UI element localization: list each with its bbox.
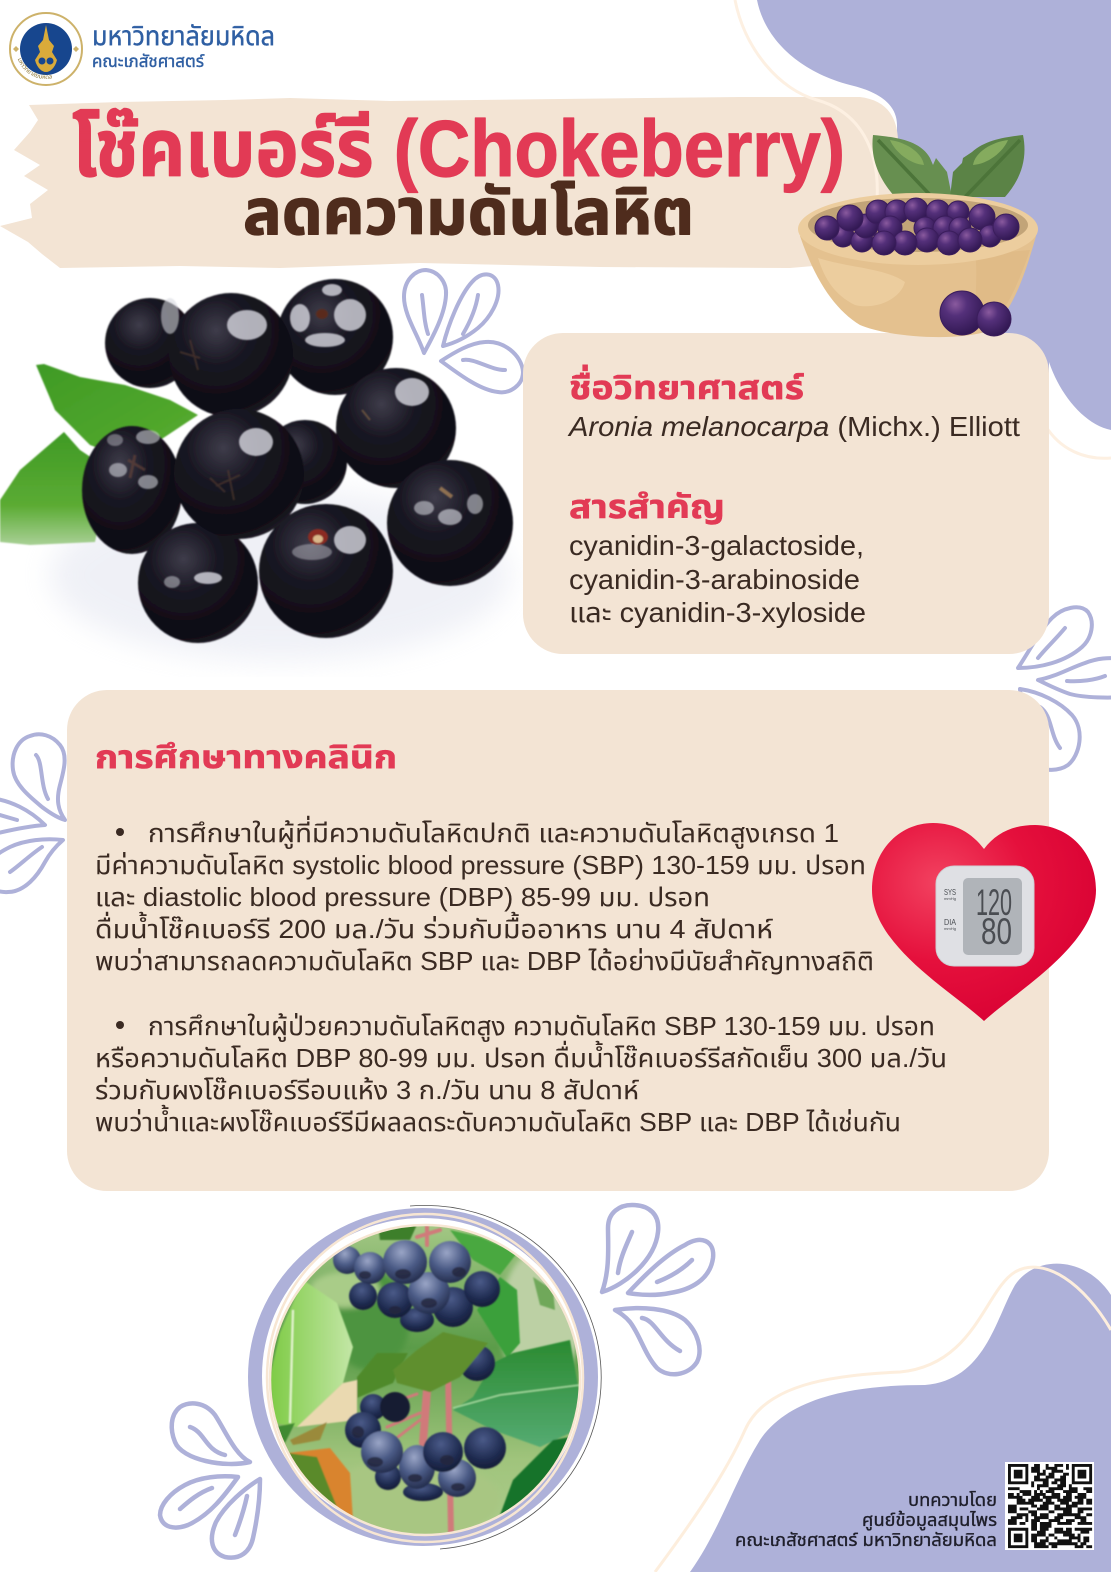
study 2 text: ร่วมกับผงโช๊คเบอร์รีอบแห้ง 3 ก./วัน นาน 8 สัปดาห์: [95, 1075, 640, 1105]
background blob: bottom right: [690, 1264, 1111, 1572]
photo: chokeberries with leaves: [0, 279, 513, 660]
decorative petals: lower left of circular photo: [160, 1403, 260, 1558]
title banner brush stroke: [0, 97, 900, 268]
study 1 text: ดื่มน้ำโช๊คเบอร์รี 200 มล./วัน ร่วมกับมื้ออาหาร นาน 4 สัปดาห์: [95, 911, 774, 944]
bowl rim: [798, 193, 1038, 265]
study 2 text: การศึกษาในผู้ป่วยความดันโลหิตสูง ความดันโลหิต SBP 130-159 มม. ปรอท: [148, 1011, 935, 1042]
circular photo: chokeberries on branch: [248, 1205, 601, 1549]
monitor readings: 80: [981, 911, 1012, 952]
heading: clinical studies: การศึกษาทางคลินิก: [95, 739, 397, 775]
study 1 text: [95, 815, 874, 976]
study 2 text: หรือความดันโลหิต DBP 80-99 มม. ปรอท ดื่มน้ำโช๊คเบอร์รีสกัดเย็น 300 มล./วัน: [95, 1040, 947, 1073]
footer credit text: ศูนย์ข้อมูลสมุนไพร: [862, 1510, 997, 1532]
compounds list: cyanidin-3-arabinoside: [569, 564, 860, 595]
bowl inner: [808, 198, 1028, 252]
title line 2: ลดความดันโลหิต: [243, 176, 694, 248]
monitor screen: [963, 878, 1022, 955]
compounds list: [569, 530, 866, 628]
study 1 text: การศึกษาในผู้ที่มีความดันโลหิตปกติ และความดันโลหิตสูงเกรด 1: [148, 815, 839, 849]
compounds list: และ cyanidin-3-xyloside: [569, 597, 866, 628]
logo text: คณะเภสัชศาสตร์: [92, 52, 205, 71]
berries: [82, 279, 513, 643]
title: [72, 104, 845, 248]
logo: Mahidol University: [9, 12, 275, 86]
study 1 text: มีค่าความดันโลหิต systolic blood pressure (SBP) 130-159 มม. ปรอท: [95, 850, 866, 880]
decorative petals: right of circular photo: [602, 1205, 713, 1374]
stems: [380, 1220, 451, 1533]
monitor readings: [944, 882, 1012, 952]
leaves: [0, 364, 198, 545]
cast shadow: [50, 490, 510, 660]
monitor body: [936, 866, 1034, 966]
study 1 text: และ diastolic blood pressure (DBP) 85-99 มม. ปรอท: [95, 882, 710, 912]
monitor readings: 120: [976, 882, 1012, 923]
thin outer ring: [410, 1205, 601, 1549]
compounds list: cyanidin-3-galactoside,: [569, 530, 864, 561]
background blob: top right: [757, 0, 1111, 430]
decorative petals: right of panels: [1018, 607, 1111, 770]
heading: scientific name: ชื่อวิทยาศาสตร์: [569, 364, 804, 406]
leaves: [270, 1218, 580, 1523]
bowl body: [800, 236, 1036, 337]
panel: scientific name and key compounds: [523, 333, 1049, 654]
monitor readings: DIA: [944, 918, 957, 927]
decorative petals: left of clinical panel: [0, 734, 65, 892]
upper berry cluster: [333, 1240, 500, 1332]
icon: heart with blood pressure monitor: [872, 823, 1096, 1021]
monitor readings: mmHg: [944, 926, 956, 931]
QR code: [1005, 1462, 1094, 1550]
study 1 text: พบว่าสามารถลดความดันโลหิต SBP และ DBP ได้อย่างมีนัยสำคัญทางสถิติ: [95, 946, 874, 976]
decorative petals: near berries: [404, 270, 523, 392]
monitor readings: mmHg: [944, 896, 956, 901]
photo contents: [265, 1218, 585, 1540]
lower berry cluster: [345, 1332, 506, 1501]
study 2 text: พบว่าน้ำและผงโช๊คเบอร์รีมีผลลดระดับความดันโลหิต SBP และ DBP ได้เช่นกัน: [95, 1104, 901, 1137]
icon: bowl of berries: [798, 135, 1038, 337]
bowl leaves: [872, 135, 1024, 197]
logo text: มหาวิทยาลัยมหิดล: [92, 21, 275, 51]
heading: key compounds: สารสำคัญ: [569, 488, 725, 525]
inner cream rings: [267, 1214, 583, 1542]
footer credit text: คณะเภสัชศาสตร์ มหาวิทยาลัยมหิดล: [735, 1530, 997, 1550]
title line 1: โช๊คเบอร์รี (Chokeberry): [72, 104, 845, 193]
lavender ring: [248, 1208, 598, 1546]
study 2 text: [95, 1011, 947, 1137]
cream contour line: top right: [735, 0, 1111, 458]
loose berries: [940, 291, 1011, 336]
monitor readings: SYS: [944, 888, 956, 897]
berry highlights and calyx details: [107, 284, 483, 588]
logo text: [92, 21, 275, 71]
footer credit text: [735, 1490, 997, 1550]
logo seal: มหาวิทยาลัยมหิดล: [18, 58, 52, 79]
panel: clinical studies: [67, 690, 1049, 1191]
heart: [872, 823, 1096, 1021]
scientific name: Aronia melanocarpa (Michx.) Elliott: [567, 411, 1020, 442]
blurred background: [310, 1250, 580, 1540]
logo seal: [9, 12, 83, 86]
footer credit text: บทความโดย: [908, 1490, 997, 1510]
cream contour line: bottom right: [655, 1267, 1111, 1572]
berries in bowl: [815, 198, 1019, 255]
